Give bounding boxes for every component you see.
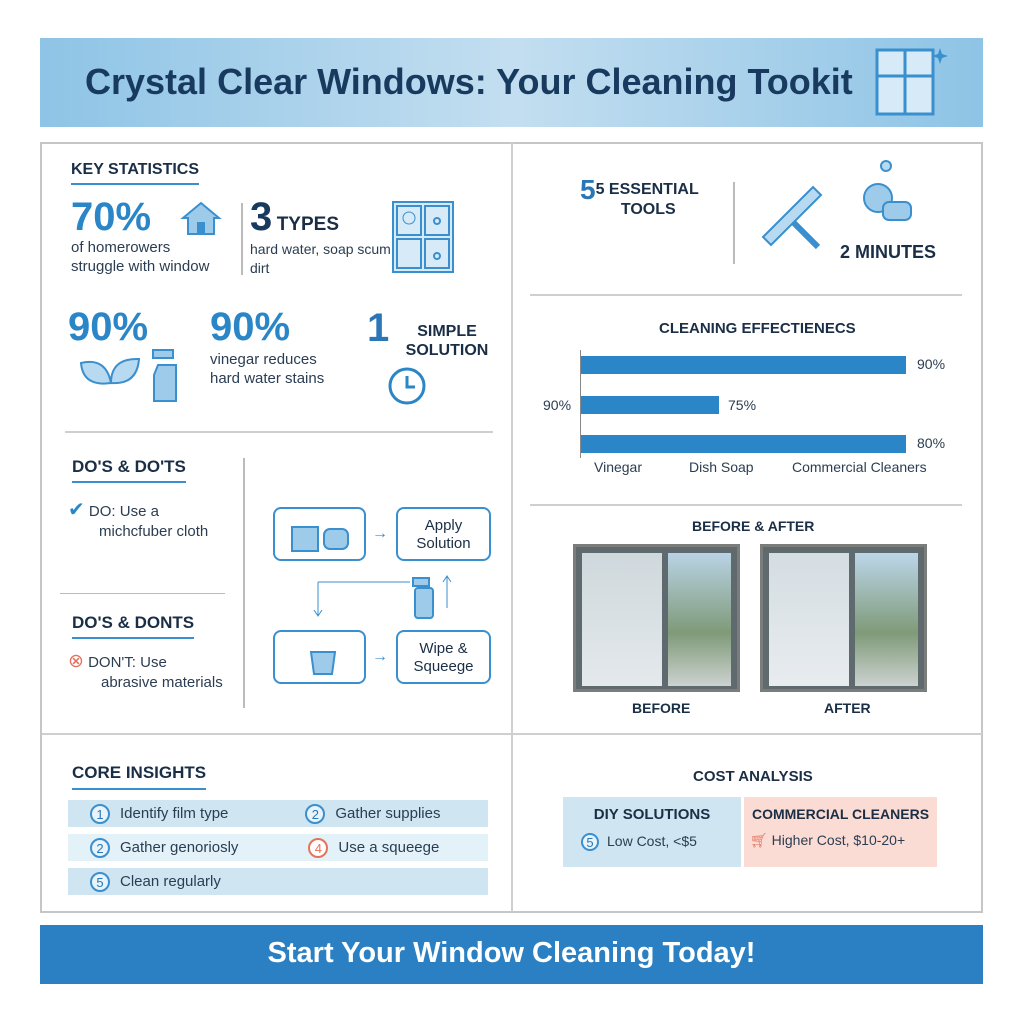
heading do: DO'S & DO'TS	[72, 457, 186, 476]
stat 70%	[71, 195, 210, 275]
chart: cleaning effectiveness: 75%	[728, 397, 756, 413]
title banner	[40, 38, 983, 127]
flow diagram: →	[372, 648, 388, 665]
stat 90% vinegar: 90%	[210, 305, 290, 349]
step box: bucket	[273, 630, 366, 684]
icon: spray arrows	[314, 575, 452, 619]
panel: before and after: AFTER	[824, 700, 871, 716]
chart: cleaning effectiveness: CLEANING EFFECTIENECS	[659, 320, 856, 337]
panel: key statistics	[68, 161, 488, 404]
chart: cleaning effectiveness: 90%	[543, 397, 571, 413]
step box: apply solution: Apply	[425, 517, 462, 534]
title: Crystal Clear Windows: Your Cleaning Tookit	[85, 61, 853, 102]
essential tools: TOOLS	[621, 201, 676, 218]
diy card: DIY SOLUTIONS	[594, 806, 710, 823]
panel: cost analysis: COST ANALYSIS	[693, 768, 813, 785]
stat 90% vinegar: vinegar reduces	[210, 351, 317, 368]
heading dont: DO'S & DONTS	[72, 613, 194, 632]
chart: cleaning effectiveness: Commercial Cleaners	[792, 459, 927, 475]
step box: apply solution	[396, 507, 491, 561]
do item	[68, 499, 208, 540]
stat 1 simple solution: 1	[367, 306, 389, 350]
panel: before and after	[573, 518, 927, 716]
stat 1 simple solution	[367, 306, 488, 404]
dont item	[68, 651, 223, 691]
chart: cleaning effectiveness: Vinegar	[594, 459, 642, 475]
stat 3 types: dirt	[250, 260, 269, 276]
step box: supplies	[273, 507, 366, 561]
panel: core insights: 4	[315, 841, 322, 856]
heading: KEY STATISTICS	[71, 161, 199, 178]
diy card: Low Cost, <$5	[607, 833, 697, 849]
dont item: abrasive materials	[101, 674, 223, 691]
chart: cleaning effectiveness: 80%	[917, 435, 945, 451]
chart: cleaning effectiveness: Dish Soap	[689, 459, 754, 475]
stat 90% vinegar: hard water stains	[210, 370, 324, 387]
insight rows	[68, 800, 488, 827]
dont item: ⊗ DON'T: Use	[68, 651, 167, 672]
panel: core insights: 2	[96, 841, 104, 856]
insight rows: 2	[312, 807, 319, 822]
step box: wipe & squeegee: Wipe &	[419, 640, 468, 657]
stat 70%: 70%	[71, 195, 151, 239]
stat 1 simple solution: SOLUTION	[406, 342, 488, 359]
2 minutes: 2 MINUTES	[840, 242, 936, 262]
icon: house	[180, 202, 222, 235]
step box: apply solution: Solution	[416, 535, 471, 552]
main panel frame	[40, 142, 983, 913]
stat 1 simple solution: SIMPLE	[417, 323, 477, 340]
commercial card: COMMERCIAL CLEANERS	[752, 806, 929, 822]
stat 3 types: 3 TYPES	[250, 195, 339, 239]
commercial card: 🛒︎ Higher Cost, $10-20+	[750, 832, 905, 848]
panel: tools summary	[580, 160, 936, 264]
panel: before and after: BEFORE	[632, 700, 690, 716]
heading: CORE INSIGHTS	[72, 763, 206, 782]
insight rows: 1	[96, 807, 104, 822]
footer banner: Start Your Window Cleaning Today!	[268, 937, 755, 969]
insight rows: Identify film type Gather supplies	[120, 805, 440, 822]
do item: ✔ DO: Use a	[68, 499, 159, 521]
flow diagram: →	[372, 525, 388, 542]
stat 70%: of homerowers	[71, 239, 170, 256]
photo: after	[760, 544, 927, 692]
panel: core insights: Clean regularly	[120, 873, 221, 890]
panel: core insights: Gather genoriosly Use a squeege	[120, 839, 439, 856]
footer banner	[40, 925, 983, 984]
photo: before	[573, 544, 740, 692]
step box: wipe & squeegee: Squeege	[413, 658, 474, 675]
icon: bubbles	[863, 160, 912, 221]
stat 90% eco: 90%	[68, 305, 148, 349]
panel: cost analysis	[563, 768, 937, 867]
icon: leaves and spray	[80, 349, 177, 402]
icon: window stains	[392, 201, 454, 273]
diy card: 5	[586, 835, 594, 850]
stat 90% vinegar	[210, 305, 324, 387]
icon: window	[876, 48, 948, 116]
chart: cleaning effectiveness	[543, 320, 945, 475]
panel: dos and donts	[60, 457, 225, 691]
panel: core insights	[68, 763, 488, 895]
stat 70%: struggle with window	[71, 258, 209, 275]
panel: before and after: BEFORE & AFTER	[692, 518, 814, 534]
stat 3 types: hard water, soap scum	[250, 241, 391, 257]
step box: wipe & squeegee	[396, 630, 491, 684]
panel: core insights: 5	[96, 875, 104, 890]
icon: squeegee	[762, 186, 822, 250]
do item: michcfuber cloth	[99, 523, 208, 540]
icon: clock	[388, 368, 426, 404]
chart: cleaning effectiveness: 90%	[917, 356, 945, 372]
stat 3 types	[250, 195, 391, 276]
essential tools: 55 ESSENTIAL	[580, 174, 699, 205]
commercial card	[744, 797, 937, 867]
diy card	[563, 797, 741, 867]
flow diagram	[273, 507, 491, 684]
